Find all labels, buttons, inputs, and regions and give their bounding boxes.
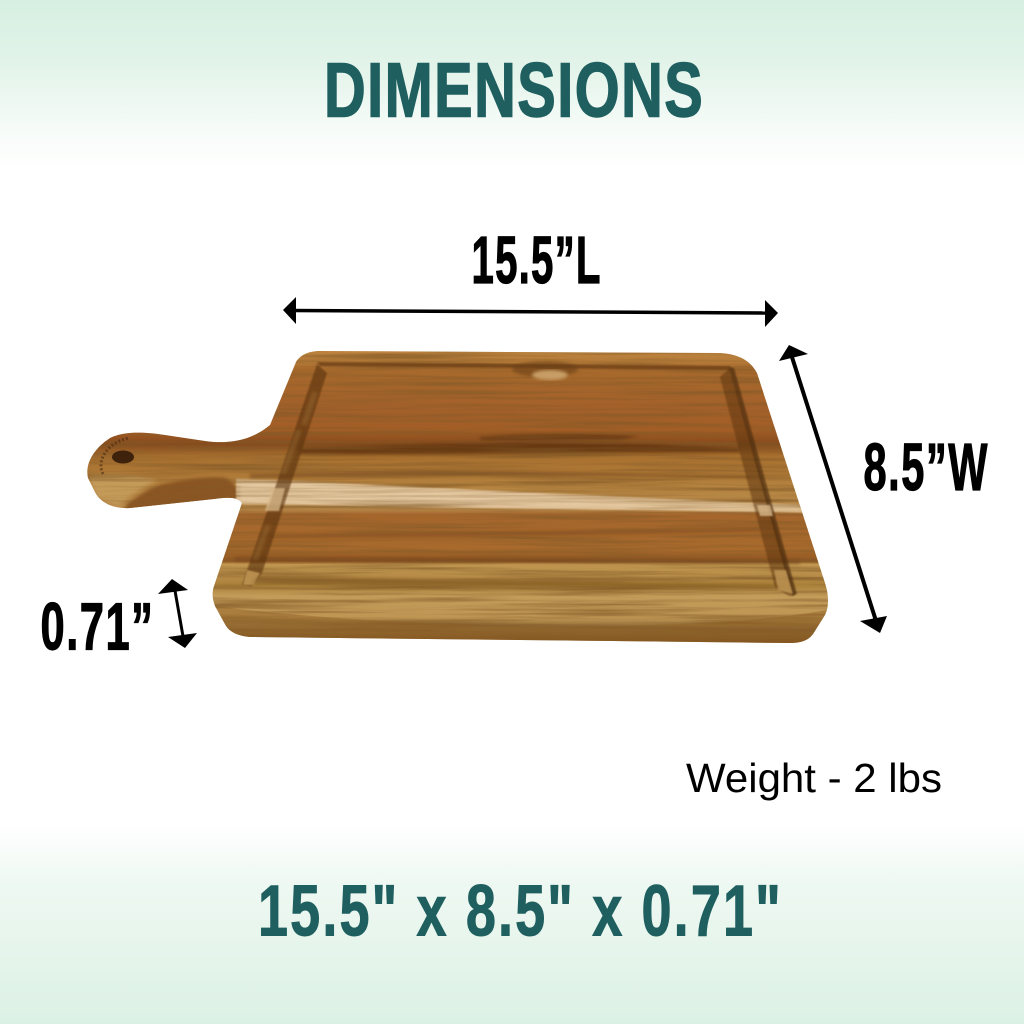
board front edge	[214, 606, 827, 646]
groove bottom line	[252, 576, 778, 590]
handle shading	[122, 476, 242, 508]
thickness label: 0.71”	[40, 589, 153, 664]
width label: 8.5”W	[864, 430, 988, 504]
juice groove	[242, 362, 797, 596]
title: DIMENSIONS	[324, 47, 703, 133]
background bottom band	[0, 825, 1024, 1024]
cutting board photo	[80, 345, 840, 650]
groove left bottom end	[243, 570, 260, 585]
groove left wood figure	[252, 392, 318, 560]
wood knot	[512, 361, 578, 380]
handle pale highlight	[88, 474, 158, 506]
wood grain texture	[80, 345, 840, 650]
groove right bottom end	[774, 570, 793, 594]
weight text: Weight - 2 lbs	[686, 755, 942, 801]
handle hole	[112, 450, 134, 464]
groove top edge	[317, 362, 730, 370]
arrow: length	[283, 297, 778, 327]
pale sapwood stripe	[236, 479, 830, 513]
groove left channel	[242, 364, 327, 586]
arrow: thickness	[158, 579, 197, 648]
background top band	[0, 0, 1024, 170]
illegible logo mark on handle	[101, 438, 129, 474]
groove left pale crossing	[265, 488, 285, 511]
knot centre	[532, 370, 568, 380]
groove right pale crossing	[757, 505, 773, 516]
board base wood tones	[80, 345, 840, 650]
groove right dark side	[729, 367, 797, 596]
dimensions summary: 15.5" x 8.5" x 0.71"	[258, 871, 781, 951]
pale stripe highlight	[240, 484, 800, 510]
arrow: width	[779, 345, 887, 633]
dark grain streaks	[220, 434, 825, 632]
length label: 15.5”L	[472, 222, 601, 298]
knot dark ring	[512, 361, 578, 377]
groove right channel	[720, 368, 795, 596]
